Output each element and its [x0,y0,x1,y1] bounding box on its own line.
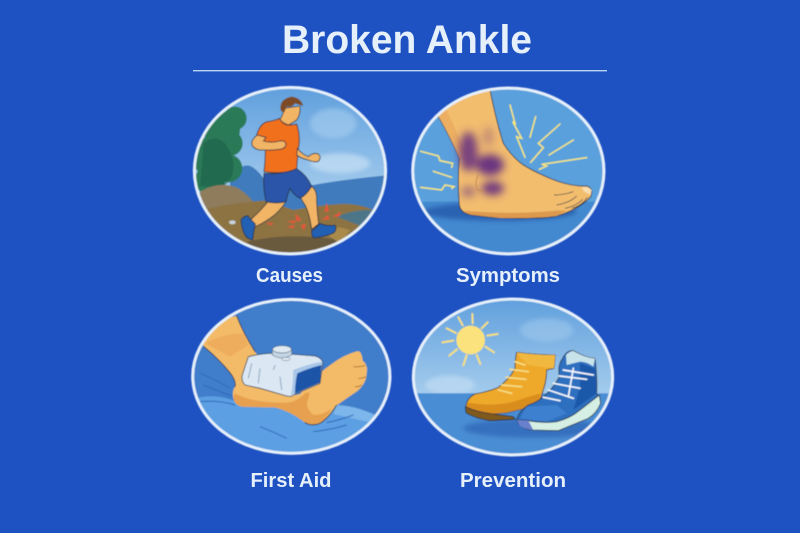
runner back leg [248,200,286,227]
runner near arm [252,135,286,150]
title underline [193,70,607,71]
runner far arm [297,148,320,162]
runner back shoe [241,216,255,240]
panel: prevention [410,297,617,492]
runner shorts [264,169,312,203]
ice pack [242,353,323,396]
illustration: sun and supportive shoes [410,297,617,457]
panel: causes [190,83,390,287]
yellow boot [465,352,555,421]
leg and foot [193,316,367,425]
label: Prevention [460,470,566,492]
sun [442,314,498,365]
toes [554,192,587,208]
pain marks [266,203,341,231]
bruise [459,127,504,197]
illustration: bruised foot with pain bolts [410,83,610,258]
label: First Aid [250,470,332,492]
frame [193,299,390,453]
illustration: runner on rocky trail [190,83,390,257]
label: Symptoms [456,265,560,287]
title: Broken Ankle [282,18,532,62]
frame [413,299,613,455]
runner hair [280,97,303,113]
foot [433,87,592,218]
runner head [280,106,300,125]
label: Causes [256,265,323,287]
blue sneaker [517,351,601,431]
pain bolts [510,105,525,157]
frame [413,88,604,254]
panel: first aid [190,297,393,492]
runner shirt [257,118,299,173]
runner front shoe [312,223,336,238]
illustration: ice pack on ankle [190,297,393,457]
panel: symptoms [410,83,610,287]
runner front leg [300,187,319,229]
frame [194,87,386,254]
ice pack cap [272,347,292,358]
